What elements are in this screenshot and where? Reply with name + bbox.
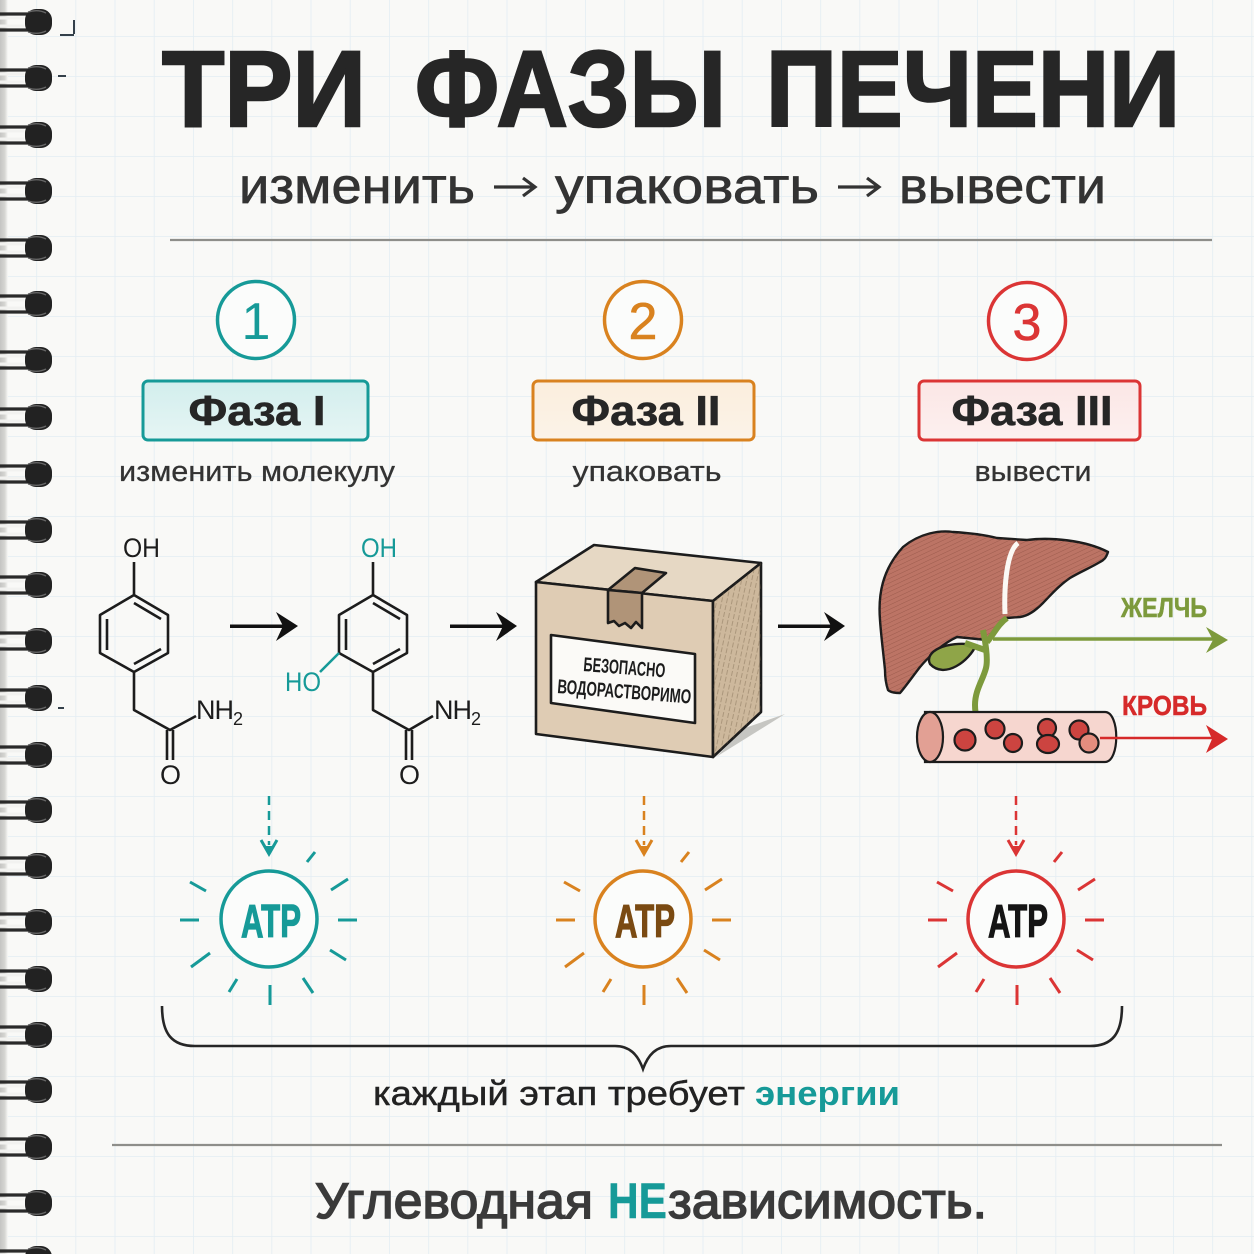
icon: liver with gallbladder [880,531,1108,693]
label: Фаза II [533,381,754,440]
blood vessel [917,712,1116,762]
step number 3 [988,282,1066,360]
footer: НЕ [608,1173,667,1229]
molecule: hydroxylated: NH [434,695,472,725]
bile duct [965,618,1007,728]
ATP 2 [556,796,731,1005]
molecule: hydroxylated: O [399,760,420,790]
molecule: hydroxylated [285,533,481,790]
title: ФАЗЫ [415,28,726,149]
molecule: hydroxylated: OH [361,533,397,563]
molecule: before [100,533,243,790]
subtitle: упаковать [555,158,819,214]
label: bile: ЖЕЛЧЬ [1120,592,1207,623]
phase caption 3: вывести [974,456,1092,488]
step number 2: 2 [629,293,657,351]
ATP 1: ATP [241,895,301,947]
footer: Углеводная [315,1173,593,1229]
phase caption 2: упаковать [572,456,722,488]
molecule: hydroxylated: 2 [471,709,481,729]
molecule: before: O [160,760,181,790]
arrow [230,612,298,641]
arrow [778,612,845,641]
energy caption: каждый этап требует [373,1075,745,1113]
step number 2 [604,282,682,358]
label: blood: КРОВЬ [1122,690,1207,721]
ATP 2: ATP [615,895,675,947]
label: Фаза III: Фаза III [952,387,1112,434]
molecule: hydroxylated: HO [285,667,321,697]
molecule: before: 2 [233,709,243,729]
step number 1: 1 [242,293,270,351]
arrow: bile [993,627,1228,653]
step number 3: 3 [1013,294,1041,352]
footer [315,1173,987,1229]
box label: БЕЗОПАСНО [583,654,666,682]
ATP 3 [928,796,1104,1005]
box label: ВОДОРАСТВОРИМО [557,676,692,708]
icon: cardboard box [536,545,785,757]
energy caption: энергии [755,1075,900,1113]
label: Фаза III [919,381,1140,440]
ATP 3: ATP [988,895,1048,947]
title: ПЕЧЕНИ [766,28,1180,149]
title: ТРИ [162,28,366,149]
label: Фаза I [143,381,368,440]
box label [557,654,692,708]
footer: зависимость. [668,1173,987,1229]
energy caption [373,1075,900,1113]
subtitle: изменить [239,158,475,214]
label: Фаза I: Фаза I [188,387,326,434]
brace [162,1006,1122,1069]
molecule: before: OH [123,533,160,563]
phase caption 1: изменить молекулу [119,456,396,488]
subtitle: вывести [899,158,1106,214]
subtitle [239,158,1106,214]
ATP 1 [180,796,357,1005]
molecule: before: NH [196,695,234,725]
label: Фаза II: Фаза II [572,387,720,434]
arrow [450,612,517,641]
title [162,28,1180,149]
spiral binding [0,9,74,1254]
arrow: blood [1100,725,1228,753]
step number 1 [218,282,294,358]
